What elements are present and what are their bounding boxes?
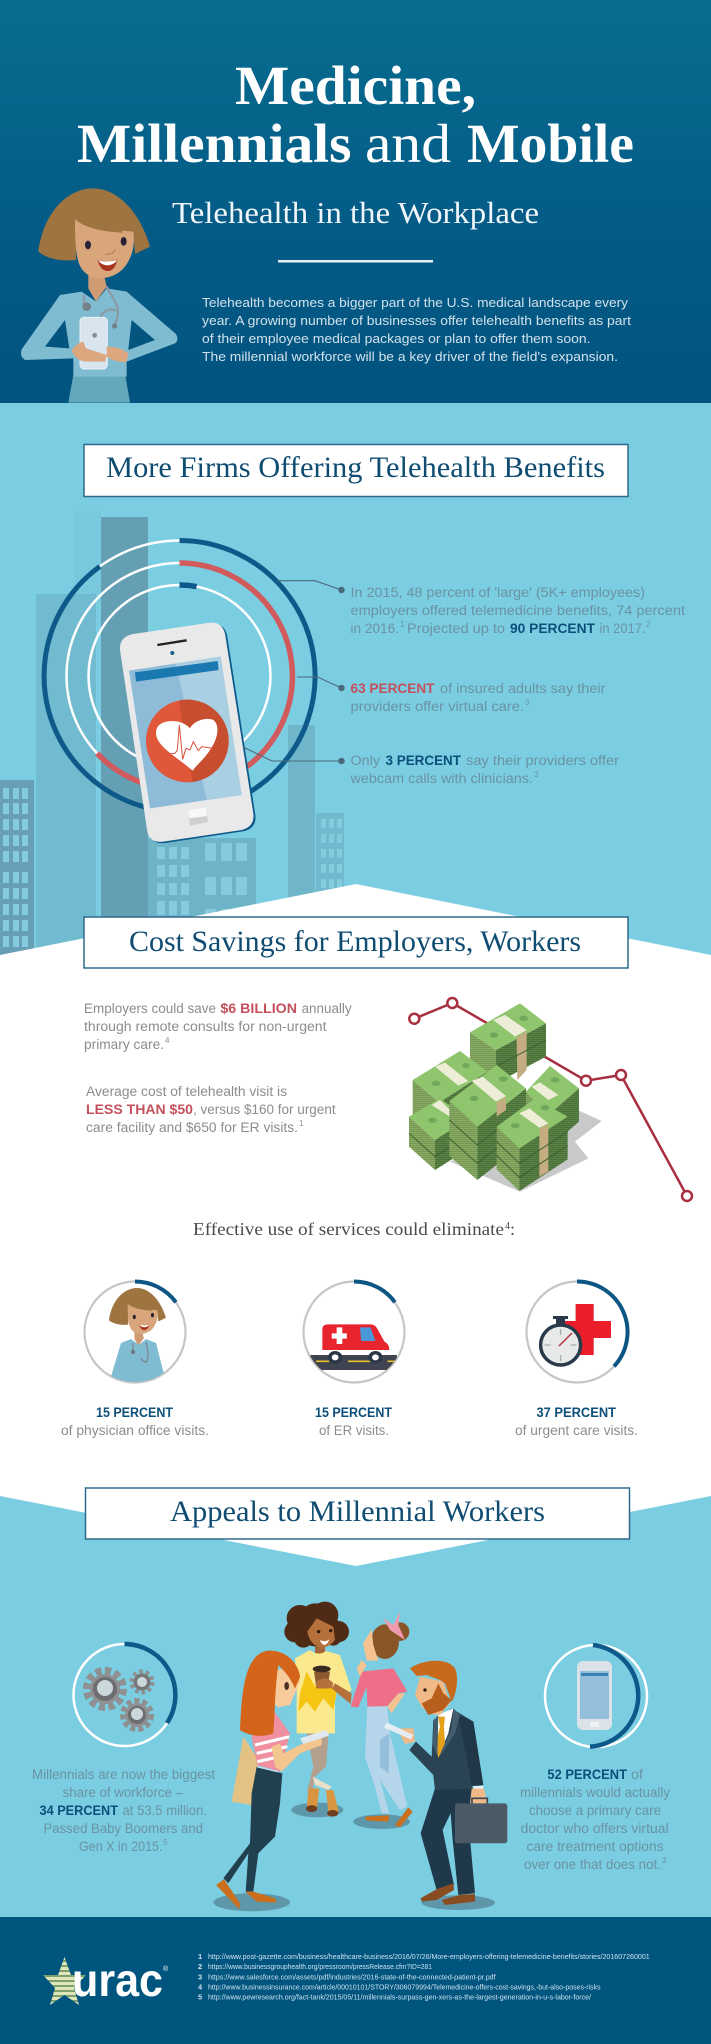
buildings backdrop [0, 511, 344, 960]
stat text: 63 percent: of insured adults say their [440, 681, 606, 696]
stat text: 3 percent: 3 PERCENT [386, 753, 462, 768]
stat: physician visits: 15 PERCENT [96, 1405, 174, 1420]
stat: physician visits [61, 1282, 209, 1438]
references: 4 [198, 1983, 203, 1992]
stat text: 3 percent: say their providers offer [466, 753, 620, 768]
stat text: 63 percent: 3 [525, 698, 530, 707]
panel: more firms section [0, 403, 711, 1003]
icon: stopwatch and cross [541, 1304, 611, 1365]
text: 52 percent [520, 1767, 670, 1872]
logo: urac: urac [72, 1954, 163, 2006]
illustration: woman with red hair [213, 1651, 329, 1911]
intro text [202, 295, 631, 364]
icon: phone with heart [120, 623, 256, 843]
stat text: 63 percent [350, 681, 606, 714]
stat text: 63 percent: providers offer virtual care. [350, 699, 524, 714]
references: 5 [198, 1993, 202, 2002]
text: less than 50: 1 [299, 1119, 304, 1128]
stat: urgent care visits [515, 1282, 638, 1438]
text: 52 percent: doctor who offers virtual [521, 1821, 669, 1836]
text: less than 50: Average cost of telehealth visit is [86, 1084, 287, 1099]
ring icon: phone [545, 1645, 647, 1747]
text: 34 percent of workforce: share of workforce – [63, 1785, 183, 1800]
stat text: 90 percent: 90 PERCENT [510, 621, 596, 636]
references: 2 [198, 1962, 202, 1971]
references: https://www.businessgrouphealth.org/pressroom/pressRelease.cfm?ID=281 [208, 1962, 432, 1971]
heading: appeals: Appeals to Millennial Workers [170, 1495, 545, 1528]
text: 52 percent: choose a primary care [529, 1803, 661, 1818]
text: 34 percent of workforce: Millennials are now the biggest [32, 1767, 215, 1782]
intro text: Telehealth becomes a bigger part of the U.S. medical landscape every [202, 295, 629, 310]
panel: header [0, 0, 711, 403]
references: 1 [198, 1952, 202, 1961]
text: 6 billion: primary care. [84, 1037, 164, 1052]
title: Medicine, [235, 55, 476, 116]
title [77, 55, 634, 174]
text: 52 percent: over one that does not. [524, 1857, 661, 1872]
stat text: 3 percent: Only [350, 753, 380, 768]
subtitle: Telehealth in the Workplace [172, 195, 539, 230]
references: 3 [198, 1972, 202, 1982]
heading: more firms: More Firms Offering Telehealth Benefits [106, 451, 605, 484]
heading: cost savings [84, 917, 628, 968]
text: less than 50: care facility and $650 for ER visits. [86, 1120, 298, 1135]
stat: ER visits: 15 PERCENT [315, 1405, 393, 1420]
stat: ER visits: of ER visits. [319, 1423, 389, 1438]
panel: cost savings section [0, 884, 711, 1496]
text: 6 billion: 4 [165, 1036, 170, 1045]
stat text: 63 percent: 63 PERCENT [350, 681, 435, 696]
text: less than 50: , versus $160 for urgent [193, 1102, 336, 1117]
title: Millennials [77, 113, 352, 174]
heading: more firms [84, 444, 628, 496]
text: 34 percent of workforce: 5 [163, 1838, 168, 1847]
stat text: 90 percent: In 2015, 48 percent of 'large' (5K+ employees) [350, 585, 645, 600]
stat text: 3 percent: 3 [534, 770, 539, 779]
stat text: 3 percent: webcam calls with clinicians. [349, 771, 533, 786]
text: 34 percent of workforce: Gen X in 2015. [79, 1839, 162, 1854]
stat text: 90 percent: in 2016. [350, 621, 399, 636]
intro text: of their employee medical packages or plan to offer them soon. [202, 331, 590, 346]
heading: cost savings: Cost Savings for Employers, Workers [129, 925, 581, 958]
stat: physician visits: of physician office visits. [61, 1423, 209, 1438]
references: http://www.pewresearch.org/fact-tank/2015/05/11/millennials-surpass-gen-xers-as-the-largest-generation-in-u-s-labor-force/ [208, 1993, 592, 2002]
text: 52 percent: of [631, 1767, 643, 1782]
text: 52 percent: care treatment options [526, 1839, 664, 1854]
references: http://www.post-gazette.com/business/healthcare-business/2016/07/26/More-employers-offering-telemedicine-benefits/stories/201607260001 [208, 1952, 650, 1961]
line chart: falling cost [409, 998, 692, 1201]
panel: footer [0, 1917, 711, 2044]
text: 6 billion: $6 BILLION [220, 1001, 297, 1016]
text: 34 percent of workforce: at 53.5 million. [122, 1803, 207, 1818]
logo: urac: ® [163, 1965, 169, 1973]
illustration: man with briefcase [384, 1661, 507, 1910]
text: less than 50: LESS THAN $50 [86, 1102, 193, 1117]
text: 6 billion: through remote consults for non-urgent [84, 1019, 327, 1034]
subheading: effective use: Effective use of services could eliminate [193, 1219, 504, 1239]
leader lines with dots [243, 581, 344, 764]
stat: urgent care visits: 37 PERCENT [536, 1405, 617, 1420]
title: Mobile [467, 113, 634, 174]
references [198, 1952, 650, 2002]
stat: urgent care visits: of urgent care visits. [515, 1423, 638, 1438]
text: 34 percent of workforce: Passed Baby Boomers and [44, 1821, 203, 1836]
icon: stacks of money [409, 1003, 602, 1192]
text: 52 percent: millennials would actually [520, 1785, 670, 1800]
stat text: 90 percent: 2 [646, 620, 651, 629]
text: 52 percent: 52 PERCENT [547, 1767, 628, 1782]
panel: millennial workers section [0, 1488, 711, 1917]
text: less than 50 [86, 1084, 336, 1135]
intro text: The millennial workforce will be a key driver of the field's expansion. [202, 349, 618, 364]
stat text: 90 percent: employers offered telemedicine benefits, 74 percent [350, 603, 685, 618]
references: https://www.salesforce.com/assets/pdf/industries/2016-state-of-the-connected-patient-pr.pdf [208, 1972, 496, 1982]
subheading: effective use: 4 [505, 1221, 510, 1232]
icon: doctor holding phone [21, 188, 177, 403]
illustration: woman with pink bow [351, 1612, 413, 1829]
stat text: 90 percent: in 2017. [600, 621, 646, 636]
references: http://www.businessinsurance.com/article/00010101/STORY/306079994/Telemedicine-offers-cost-savings,-but-also-poses-risks [208, 1983, 601, 1992]
illustration: woman with afro and coffee [284, 1602, 352, 1817]
subheading: effective use: : [510, 1219, 515, 1239]
stat text: 3 percent [349, 753, 620, 786]
stat: ER visits [304, 1282, 404, 1438]
title: and [365, 113, 451, 174]
text: 6 billion [84, 1001, 352, 1052]
ring icon: gears [74, 1644, 176, 1746]
heading: appeals [86, 1488, 630, 1539]
icon: ambulance [310, 1324, 397, 1370]
text: 6 billion: annually [302, 1001, 352, 1016]
text: 34 percent of workforce: 34 PERCENT [40, 1803, 119, 1818]
stat text: 90 percent [350, 585, 685, 636]
text: 52 percent: 3 [662, 1856, 667, 1865]
icon: doctor portrait [109, 1288, 166, 1382]
text: 34 percent of workforce [32, 1767, 215, 1854]
stat text: 90 percent: Projected up to [407, 621, 505, 636]
stat text: 90 percent: 1 [400, 620, 405, 629]
text: 6 billion: Employers could save [84, 1001, 216, 1016]
intro text: year. A growing number of businesses offer telehealth benefits as part [202, 313, 631, 328]
ring chart: percent rings [44, 540, 315, 812]
